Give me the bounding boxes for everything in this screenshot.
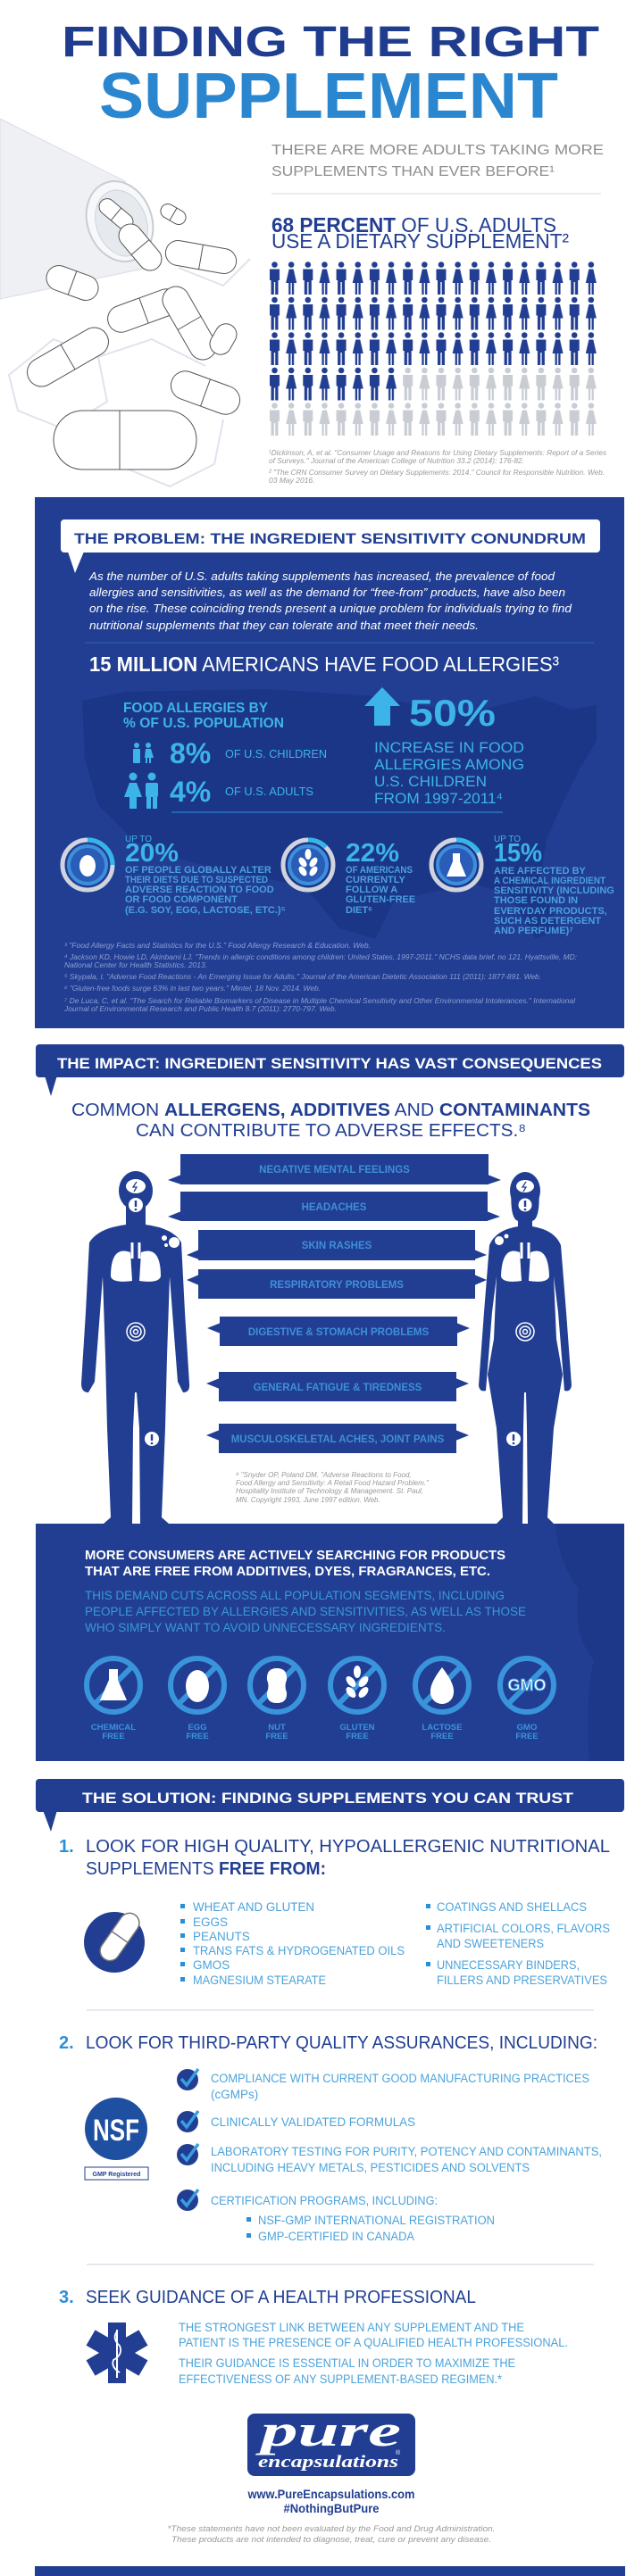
subtitle: SUPPLEMENTS THAN EVER BEFORE¹ [271,164,555,179]
banners: adverse effects list: MUSCULOSKELETAL ACHES, JOINT PAINS [231,1434,445,1445]
step 3 heading: SEEK GUIDANCE OF A HEALTH PROFESSIONAL [86,2288,476,2307]
stat: 22%: 22% [346,839,399,868]
list: free from: TRANS FATS & HYDROGENATED OILS [193,1944,405,1957]
icon: capsule circle [84,1909,145,1973]
banners: adverse effects list [168,1154,501,1453]
checklist: quality assurances: COMPLIANCE WITH CURRENT GOOD MANUFACTURING PRACTICES [211,2072,589,2085]
banners: adverse effects list: HEADACHES [302,1202,367,1213]
problem header: THE PROBLEM: THE INGREDIENT SENSITIVITY CONUNDRUM [74,530,586,547]
footnote 8: Food Allergy and Sensitivity: A Retail Food Hazard Problem." [236,1479,430,1487]
panel: consumers free-from: MORE CONSUMERS ARE ACTIVELY SEARCHING FOR PRODUCTS [85,1548,505,1563]
list: free from: ARTIFICIAL COLORS, FLAVORS [437,1922,610,1935]
step 1 heading: 1. [59,1837,74,1857]
references: problem panel: Journal of Environmental Research and Public Health 8.7 (2011): 2770-797. Web. [63,1005,337,1013]
contact: website and hashtag [247,2487,414,2515]
intro paragraph [88,569,572,632]
banners: adverse effects list: DIGESTIVE & STOMACH PROBLEMS [248,1327,429,1338]
impact subheading [71,1101,590,1141]
checklist: quality assurances: LABORATORY TESTING FOR PURITY, POTENCY AND CONTAMINANTS, [211,2145,602,2158]
stat: 15%: UP TO [494,835,521,844]
checklist: quality assurances: CERTIFICATION PROGRAMS, INCLUDING: [211,2194,438,2207]
references top [269,448,607,485]
icon: NSF badge: GMP Registered [93,2172,140,2178]
subtitle [271,143,604,179]
stat: 22%: DIET⁶ [346,905,372,916]
references: problem panel: National Center for Health Statistics. 2013. [64,961,207,969]
title [62,19,599,132]
icon: NSF badge: NSF [93,2114,139,2148]
stat: 50% increase: 50% [409,692,496,734]
stat: 20%: ADVERSE REACTION TO FOOD [125,885,274,895]
heading: 15 million: 15 MILLION AMERICANS HAVE FOOD ALLERGIES³ [89,652,559,676]
references: problem panel: ⁵ Skypala, I. "Adverse Food Reactions - An Emerging Issue for Adults." Journal of the American Dietetic Association 111 (2011): 1877-891. Web. [64,973,541,981]
list: free from: UNNECESSARY BINDERS, [437,1958,580,1972]
title: FINDING THE RIGHT [62,19,599,66]
problem header [61,519,600,573]
icon: chemical free: CHEMICAL [91,1723,136,1733]
stat: 20%: 20% [125,839,179,868]
stat heading: 68 percent [271,213,569,253]
stat: 20%: OF PEOPLE GLOBALLY ALTER [125,865,271,876]
food allergies by population: % OF U.S. POPULATION [123,716,284,731]
step 1 heading: SUPPLEMENTS FREE FROM: [86,1859,326,1879]
stat: 20%: UP TO [125,835,152,844]
intro paragraph: As the number of U.S. adults taking supplements has increased, the prevalence of food [88,569,555,583]
contact: website and hashtag: www.PureEncapsulations.com [247,2487,414,2501]
stat: 15%: A CHEMICAL INGREDIENT [494,876,605,886]
list: free from [180,1900,610,1987]
checklist: quality assurances: GMP-CERTIFIED IN CANADA [258,2230,414,2243]
stat: 15%: 15% [494,839,542,868]
intro paragraph: allergies and sensitivities, as well as the demand for “free-from” products, have also been [89,586,565,599]
references: problem panel: ⁴ Jackson KD, Howie LD, Akinbami LJ. "Trends in allergic conditions among children: United States, 1997-2011." NCHS data brief, no 121. Hyattsville, MD: [64,953,577,961]
banners: adverse effects list: GENERAL FATIGUE & TIREDNESS [254,1383,422,1393]
logo: pure encapsulations [247,2406,415,2476]
food allergies by population [123,701,327,809]
stat: 22%: CURRENTLY [346,875,405,885]
checklist: quality assurances: INCLUDING HEAVY METALS, PESTICIDES AND SOLVENTS [211,2161,530,2174]
checklist: quality assurances [177,2069,602,2243]
text: health professional: PATIENT IS THE PRESENCE OF A QUALIFIED HEALTH PROFESSIONAL. [179,2336,568,2349]
icon: egg free [171,1658,224,1741]
logo: pure encapsulations: pure [255,2406,401,2456]
stat heading: 68 percent: 68 PERCENT OF U.S. ADULTS [271,213,556,237]
impact header: THE IMPACT: INGREDIENT SENSITIVITY HAS VAST CONSEQUENCES [57,1055,602,1072]
references top: ² "The CRN Consumer Survey on Dietary Supplements: 2014." Council for Responsible Nutrition. Web. [269,468,605,477]
intro paragraph: on the rise. These coinciding trends present a unique problem for individuals trying to find [89,602,572,615]
contact: website and hashtag: #NothingButPure [284,2501,380,2515]
icon: chemical free: FREE [102,1732,125,1741]
stat: 20%: OR FOOD COMPONENT [125,894,238,905]
stat: 20%: (E.G. SOY, EGG, LACTOSE, ETC.)⁵ [125,905,286,916]
list: free from: EGGS [193,1915,228,1929]
icon: gmo free [500,1658,554,1741]
stat: 50% increase: INCREASE IN FOOD [374,739,524,756]
stat: 50% increase [364,687,524,807]
title: SUPPLEMENT [99,61,558,132]
figure: man silhouette [81,1171,189,1524]
footnote 8: ⁸ "Snyder OP, Poland DM. "Adverse Reactions to Food, [236,1471,412,1479]
people grid chart (68 of 100) [269,262,602,437]
stat: 22%: GLUTEN-FREE [346,894,415,905]
references: problem panel: ⁶ "Gluten-free foods surge 63% in last two years." Mintel, 18 Nov. 2014. Web. [64,985,321,993]
stat: 15%: EVERYDAY PRODUCTS, [494,906,607,917]
logo: pure encapsulations: encapsulations [258,2453,398,2472]
references: problem panel: ³ "Food Allergy Facts and Statistics for the U.S." Food Allergy Research & Education. Web. [64,942,371,950]
list: free from: COATINGS AND SHELLACS [437,1900,587,1914]
step 1 heading: LOOK FOR HIGH QUALITY, HYPOALLERGENIC NUTRITIONAL [86,1837,610,1857]
icon: NSF badge [85,2098,148,2180]
footnote 8 [236,1471,430,1504]
bottom bar [35,2566,625,2576]
references top: ¹Dickinson, A, et al. "Consumer Usage and Reasons for Using Dietary Supplements: Report of a Series [269,448,607,457]
impact subheading: CAN CONTRIBUTE TO ADVERSE EFFECTS.⁸ [136,1121,526,1141]
text: health professional: THEIR GUIDANCE IS ESSENTIAL IN ORDER TO MAXIMIZE THE [179,2356,515,2370]
impact subheading: COMMON ALLERGENS, ADDITIVES AND CONTAMINANTS [71,1101,590,1120]
panel: consumers free-from: THIS DEMAND CUTS ACROSS ALL POPULATION SEGMENTS, INCLUDING [85,1588,505,1602]
checklist: quality assurances: (cGMPs) [211,2088,258,2101]
disclaimer: *These statements have not been evaluated by the Food and Drug Administration. [168,2524,495,2534]
icon: chemical free [87,1658,140,1741]
logo: pure encapsulations: ® [396,2449,401,2456]
step 2 heading: LOOK FOR THIRD-PARTY QUALITY ASSURANCES, INCLUDING: [86,2033,597,2053]
solution header [36,1779,624,1832]
stat: 50% increase: FROM 1997-2011⁴ [374,790,503,807]
disclaimer [168,2524,495,2545]
footnote 8: MN. Copyright 1993, June 1997 edition. Web. [236,1496,380,1504]
stat: 20% [125,835,286,916]
icon: nut free: NUT [268,1723,286,1733]
step 3 heading: 3. [59,2288,74,2307]
illustration: pill bottle and capsules [0,119,250,486]
list: free from: WHEAT AND GLUTEN [193,1900,314,1914]
icon: gmo free: GMO [517,1723,537,1733]
icon: wheat circle stat [283,840,333,890]
icon: gluten free: GLUTEN [339,1723,375,1733]
step 2 heading: 2. [59,2033,74,2053]
icon: gmo free: GMO [507,1676,547,1694]
icon: egg free: FREE [186,1732,209,1741]
footnote 8: Hospitality Institute of Technology & Management. St. Paul, [236,1487,423,1495]
stat: 15% [494,835,614,936]
icon: lactose free: FREE [430,1732,454,1741]
stat: 22% [346,839,415,916]
list: free from: PEANUTS [193,1930,250,1943]
text: health professional: THE STRONGEST LINK BETWEEN ANY SUPPLEMENT AND THE [179,2321,524,2334]
stat: 50% increase: ALLERGIES AMONG [374,756,524,773]
food allergies by population: OF U.S. ADULTS [225,785,313,798]
map silhouette [82,689,597,939]
figure: woman silhouette [479,1172,572,1524]
stat: 15%: SUCH AS DETERGENT [494,916,601,927]
banners: adverse effects list: NEGATIVE MENTAL FEELINGS [259,1165,410,1176]
references: problem panel: ⁷ De Luca, C, et al. "The Search for Reliable Biomarkers of Disease in Multiple Chemical Sensitivity and Other Environmental Intolerances." International [64,997,575,1005]
intro paragraph: nutritional supplements that they can tolerate and that meet their needs. [89,619,479,632]
references top: 03 May 2016. [269,476,315,485]
icon: egg free: EGG [188,1723,207,1733]
stat: 15%: SENSITIVITY (INCLUDING [494,885,614,896]
panel: the problem [35,497,624,1028]
list: free from: MAGNESIUM STEARATE [193,1974,326,1987]
icon: gmo free: FREE [515,1732,539,1741]
text: health professional: EFFECTIVENESS OF ANY SUPPLEMENT-BASED REGIMEN.* [179,2372,503,2386]
stat heading: 68 percent: USE A DIETARY SUPPLEMENT² [271,229,569,253]
food allergies by population: FOOD ALLERGIES BY [123,701,268,716]
references: problem panel [63,942,577,1013]
panel: consumers free-from [36,1524,624,1761]
panel: consumers free-from: WHO SIMPLY WANT TO AVOID UNNECESSARY INGREDIENTS. [85,1620,446,1634]
icon: gluten free: FREE [346,1732,369,1741]
stat: 50% increase: U.S. CHILDREN [374,773,487,790]
impact header [36,1044,624,1096]
banners: adverse effects list: RESPIRATORY PROBLEMS [270,1280,404,1291]
icon: lactose free [415,1658,469,1741]
panel: consumers free-from: THAT ARE FREE FROM ADDITIVES, DYES, FRAGRANCES, ETC. [85,1564,490,1579]
food allergies by population: OF U.S. CHILDREN [225,748,327,760]
icon: nut free [250,1658,304,1741]
stat: 20%: THEIR DIETS DUE TO SUSPECTED [125,875,268,885]
checklist: quality assurances: NSF-GMP INTERNATIONAL REGISTRATION [258,2214,495,2227]
references top: of Surveys." Journal of the American College of Nutrition 33.2 (2014): 176-82. [269,456,524,465]
stat: 15%: THOSE FOUND IN [494,895,578,906]
stat: 22%: OF AMERICANS [346,865,413,876]
icon: egg circle stat [63,840,113,890]
icon: flask circle stat [431,840,481,890]
food allergies by population: 4% [170,776,211,808]
text: health professional [179,2321,568,2386]
icon: star of life [87,2323,147,2383]
subtitle: THERE ARE MORE ADULTS TAKING MORE [271,143,604,158]
stat: 22%: FOLLOW A [346,885,397,895]
food allergies by population: 8% [170,737,211,769]
panel: consumers free-from: PEOPLE AFFECTED BY ALLERGIES AND SENSITIVITIES, AS WELL AS THOSE [85,1604,526,1618]
list: free from: FILLERS AND PRESERVATIVES [437,1974,607,1987]
icon: nut free: FREE [265,1732,288,1741]
list: free from: AND SWEETENERS [437,1937,544,1950]
solution header: THE SOLUTION: FINDING SUPPLEMENTS YOU CAN TRUST [82,1790,574,1807]
list: free from: GMOS [193,1958,230,1972]
icon: gluten free [330,1658,384,1741]
stat: 15%: ARE AFFECTED BY [494,866,587,877]
disclaimer: These products are not intended to diagnose, treat, cure or prevent any disease. [171,2535,491,2545]
banners: adverse effects list: SKIN RASHES [302,1241,372,1251]
step 1 heading [59,1837,610,1879]
stat: 15%: AND PERFUME)⁷ [494,926,573,936]
checklist: quality assurances: CLINICALLY VALIDATED FORMULAS [211,2115,415,2129]
icon: lactose free: LACTOSE [422,1723,463,1733]
